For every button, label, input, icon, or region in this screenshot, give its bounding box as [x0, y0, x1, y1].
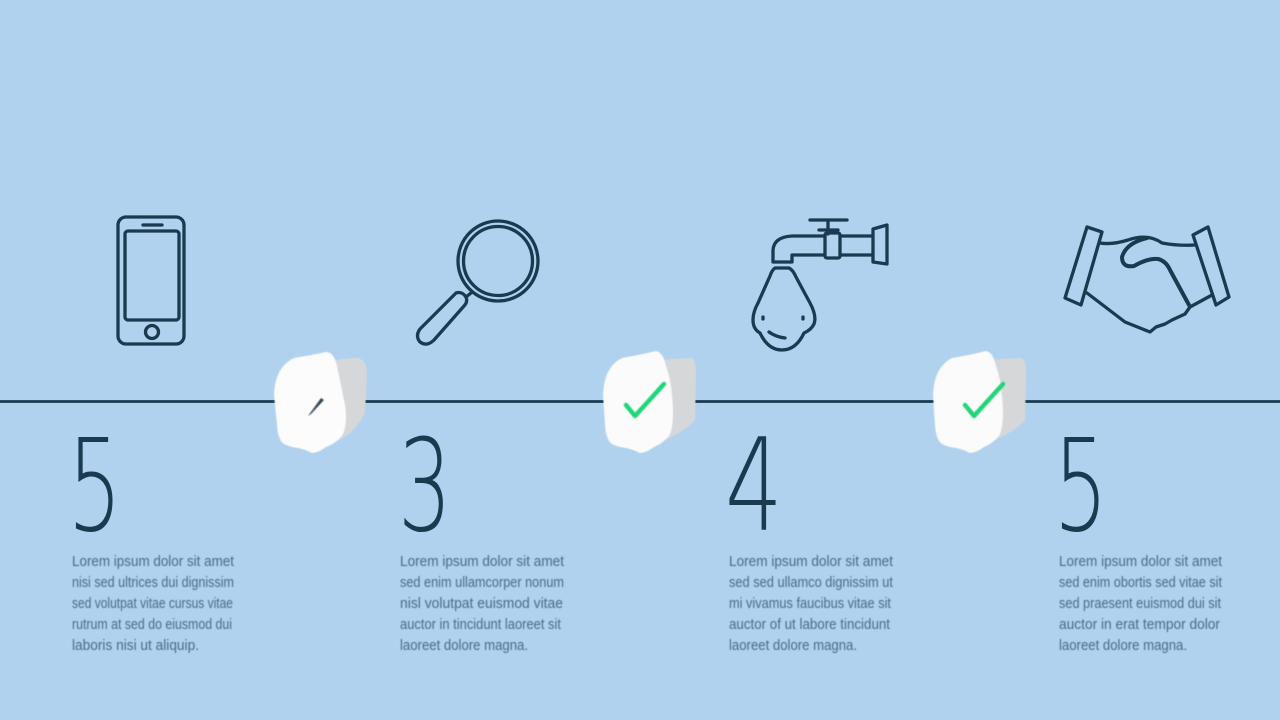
text block: step 1: Lorem ipsum dolor sit amet — [72, 553, 235, 570]
text block: step 1: rutrum at sed do eiusmod dui — [72, 616, 232, 633]
marker 2: white blob with green check — [603, 351, 696, 453]
marker 1: white blob with needle mark — [274, 352, 367, 453]
number: step 2: 3 — [398, 411, 452, 561]
text block: step 4 — [1059, 553, 1223, 654]
text block: step 1: laboris nisi ut aliquip. — [72, 637, 199, 654]
text block: step 3: auctor of ut labore tincidunt — [729, 616, 891, 633]
text block: step 4: sed enim obortis sed vitae sit — [1059, 574, 1223, 591]
text block: step 2: nisl volutpat euismod vitae — [400, 595, 563, 612]
text block: step 1: nisi sed ultrices dui dignissim — [72, 574, 234, 591]
text block: step 1 — [72, 553, 235, 654]
icon: handshake — [1065, 227, 1229, 332]
text block: step 3: sed sed ullamco dignissim ut — [729, 574, 894, 591]
text block: step 2: Lorem ipsum dolor sit amet — [400, 553, 565, 570]
text block: step 3: Lorem ipsum dolor sit amet — [729, 553, 894, 570]
text block: step 2 — [400, 553, 565, 654]
text block: step 4: sed praesent euismod dui sit — [1059, 595, 1222, 612]
number: step 4: 5 — [1054, 411, 1108, 561]
number: step 3: 4 — [725, 412, 783, 561]
text block: step 4: Lorem ipsum dolor sit amet — [1059, 553, 1223, 570]
text block: step 1: sed volutpat vitae cursus vitae — [72, 595, 233, 612]
text block: step 2: sed enim ullamcorper nonum — [400, 574, 564, 591]
icon: magnifying glass — [418, 221, 538, 344]
text block: step 2: auctor in tincidunt laoreet sit — [400, 616, 562, 633]
marker 3: white blob with green check — [933, 351, 1026, 453]
icon: smartphone — [118, 217, 184, 344]
text block: step 2: laoreet dolore magna. — [400, 637, 528, 654]
text block: step 3: laoreet dolore magna. — [729, 637, 857, 654]
text block: step 3: mi vivamus faucibus vitae sit — [729, 595, 892, 612]
text block: step 4: auctor in erat tempor dolor — [1059, 616, 1220, 633]
text block: step 3 — [729, 553, 894, 654]
text block: step 4: laoreet dolore magna. — [1059, 637, 1187, 654]
number: step 1: 5 — [68, 411, 122, 561]
icon: water tap with droplet — [753, 220, 887, 350]
